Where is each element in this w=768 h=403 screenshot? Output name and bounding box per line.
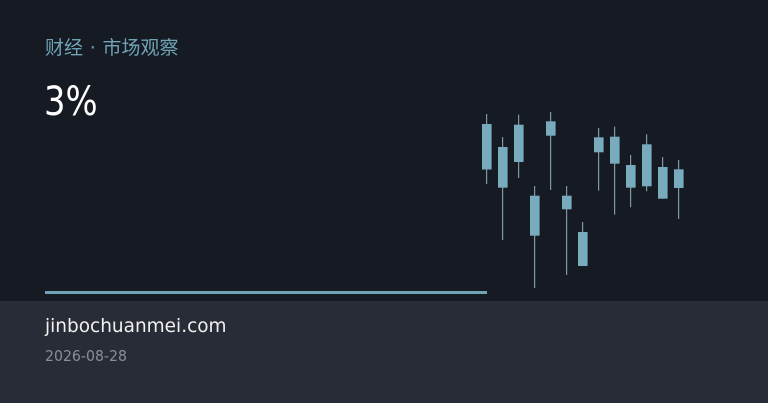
date: 2026-08-28 — [45, 347, 127, 365]
site domain: jinbochuanmei.com — [45, 315, 227, 337]
footer band — [0, 301, 768, 403]
accent line — [45, 291, 487, 294]
category label: 财经 · 市场观察 — [45, 37, 179, 59]
headline value: 3% — [44, 79, 98, 125]
